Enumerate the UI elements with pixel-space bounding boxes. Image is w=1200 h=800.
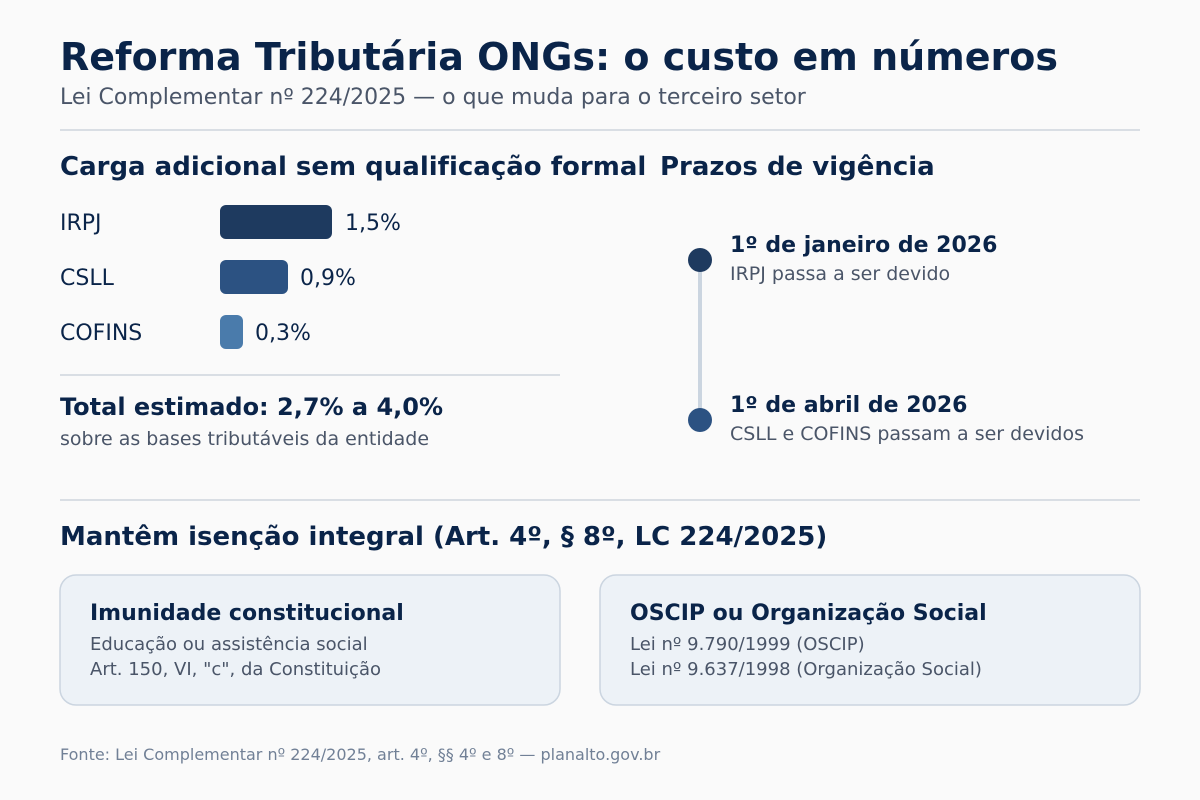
milestone: April 2026 [688,393,1084,445]
bar row: IRPJ: IRPJ [60,211,102,236]
panel: timeline [660,152,1084,445]
bar row: CSLL [60,260,356,294]
total note: sobre as bases tributáveis da entidade [60,428,429,450]
card: constitutional immunity: Imunidade constitucional [90,601,404,626]
total estimate: Total estimado: 2,7% a 4,0% [60,393,443,421]
card: OSCIP or social organization: Lei nº 9.790/1999 (OSCIP) [630,634,865,655]
card: OSCIP or social organization: Lei nº 9.637/1998 (Organização Social) [630,659,982,680]
bar row: IRPJ: 1,5% [345,211,401,236]
bar row: CSLL: CSLL [60,266,115,291]
bar row: COFINS: 0,3% [255,321,311,346]
card: OSCIP or social organization: OSCIP ou Organização Social [630,601,987,626]
milestone: January 2026 [688,233,997,285]
bar row: IRPJ [60,205,401,239]
bar row: COFINS [60,315,311,349]
milestone: April 2026: CSLL e COFINS passam a ser devidos [730,423,1084,445]
subtitle: Lei Complementar nº 224/2025 — o que muda para o terceiro setor [60,85,807,110]
bar row: COFINS: COFINS [60,321,142,346]
panel: additional burden bar chart [60,152,646,450]
milestone: April 2026: 1º de abril de 2026 [730,393,967,418]
title: Reforma Tributária ONGs: o custo em números [60,35,1058,79]
milestone: January 2026: 1º de janeiro de 2026 [730,233,997,258]
card: constitutional immunity: Art. 150, VI, "c", da Constituição [90,659,381,680]
card: constitutional immunity [60,575,560,705]
source note: Fonte: Lei Complementar nº 224/2025, art. 4º, §§ 4º e 8º — planalto.gov.br [60,745,661,764]
heading: exemptions: Mantêm isenção integral (Art. 4º, § 8º, LC 224/2025) [60,522,827,552]
card: constitutional immunity: Educação ou assistência social [90,634,368,655]
card: OSCIP or social organization [600,575,1140,705]
bar row: CSLL: 0,9% [300,266,356,291]
timeline connector [698,260,702,420]
heading: additional burden: Carga adicional sem qualificação formal [60,152,646,182]
milestone: January 2026: IRPJ passa a ser devido [730,263,950,285]
heading: timeline: Prazos de vigência [660,152,935,182]
